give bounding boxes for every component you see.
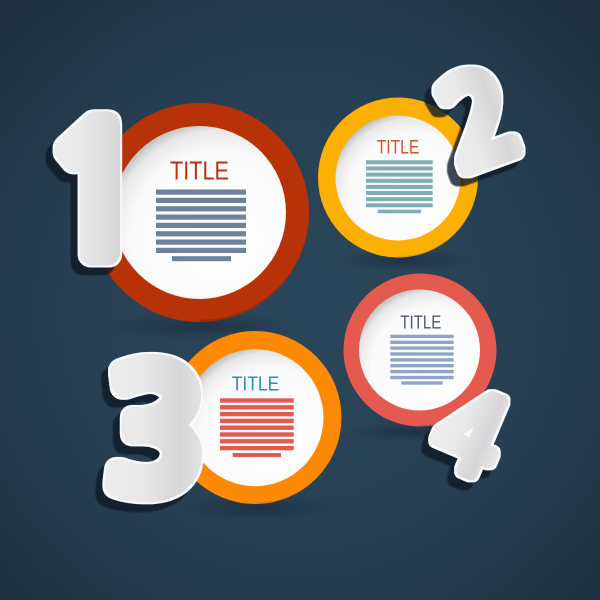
text block: step 1 lines [156, 190, 246, 261]
text block: step 2 lines [366, 160, 433, 213]
panel: step 3 circle [188, 331, 342, 514]
number 2: 2 [426, 54, 533, 189]
heading: step 3 title: TITLE [232, 373, 279, 396]
panel: step 1 circle [90, 103, 309, 340]
panel: step 2 circle [318, 98, 478, 271]
heading: step 4 title: TITLE [400, 311, 441, 332]
text block: step 3 lines [220, 398, 294, 457]
number 1: 1 [43, 108, 149, 280]
panel: step 4 circle [344, 274, 496, 442]
number 3: 3 [105, 353, 205, 515]
text block: step 4 lines [390, 335, 454, 385]
heading: step 1 title: TITLE [170, 158, 229, 186]
heading: step 2 title: TITLE [377, 137, 419, 158]
number 4: 4 [420, 374, 520, 495]
